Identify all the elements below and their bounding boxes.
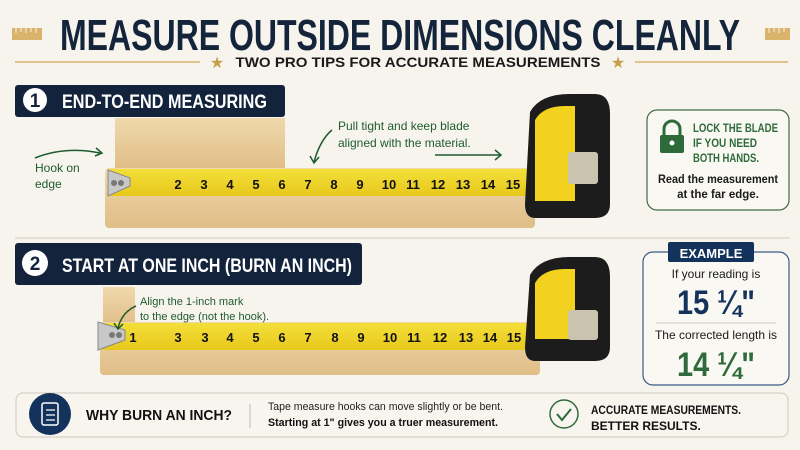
illustration 1: wood and tape: 5 (252, 177, 260, 192)
callout: align 1-inch mark: to the edge (not the hook). (140, 311, 269, 323)
panel: lock the blade: BOTH HANDS. (693, 151, 759, 165)
banner 2: 2 (30, 254, 40, 275)
illustration 2: wood and tape: 5 (252, 330, 260, 345)
illustration 2: wood and tape: 6 (278, 330, 286, 345)
bottom bar: Starting at 1" gives you a truer measurement. (268, 417, 498, 429)
banner 1: END-TO-END MEASURING (62, 92, 267, 113)
panel: lock the blade: LOCK THE BLADE (693, 121, 778, 135)
tape case 1 (525, 94, 610, 218)
illustration 1: wood and tape: 14 (481, 177, 496, 192)
illustration 1: wood and tape: 15 (506, 177, 520, 192)
illustration 1: wood and tape: 4 (226, 177, 234, 192)
illustration 1: wood and tape: 3 (200, 177, 208, 192)
illustration 1: wood and tape: 2 (174, 177, 182, 192)
illustration 1: wood and tape: 11 (406, 177, 420, 192)
callout: align 1-inch mark: Align the 1-inch mark (140, 296, 244, 308)
bottom bar: BETTER RESULTS. (591, 419, 701, 433)
icon: lock (660, 121, 684, 153)
bottom bar: WHY BURN AN INCH? (86, 407, 232, 424)
banner 1 (15, 85, 285, 117)
illustration 2: wood and tape: 1 (129, 330, 137, 345)
bottom bar: Tape measure hooks can move slightly or be bent. (268, 401, 503, 413)
illustration 1: wood and tape (105, 94, 610, 228)
callout: hook on edge: edge (35, 177, 62, 191)
icon: ruler right (765, 28, 790, 40)
illustration 2: wood and tape: 11 (407, 330, 421, 345)
illustration 2: wood and tape: 14 (483, 330, 498, 345)
panel: example (643, 242, 789, 385)
illustration 2: wood and tape: 15 (507, 330, 521, 345)
tape case 2 (525, 257, 610, 361)
illustration 1: wood and tape: 6 (278, 177, 286, 192)
subtitle (15, 54, 788, 72)
panel: lock the blade: IF YOU NEED (693, 136, 757, 150)
illustration 2: wood and tape: 7 (304, 330, 312, 345)
callout: align 1-inch mark (114, 296, 269, 329)
illustration 2: wood and tape: 10 (383, 330, 397, 345)
illustration 1: wood and tape: 8 (330, 177, 338, 192)
panel: example: If your reading is (672, 267, 760, 281)
panel: lock the blade (647, 110, 789, 210)
callout: hook on edge: Hook on (35, 161, 80, 175)
illustration 2: wood and tape: 12 (433, 330, 447, 345)
panel: example: 14 ¼" (677, 346, 755, 384)
illustration 2: wood and tape: 3 (174, 330, 182, 345)
banner 1: 1 (30, 91, 41, 112)
subtitle: ★ (210, 55, 224, 72)
bottom bar: ACCURATE MEASUREMENTS. (591, 403, 741, 417)
icon: ruler left (12, 28, 42, 40)
banner 2: START AT ONE INCH (BURN AN INCH) (62, 256, 352, 277)
illustration 1: wood and tape: 7 (304, 177, 312, 192)
panel: example: 15 ¼" (677, 284, 755, 322)
callout: pull tight (310, 119, 501, 163)
callout: hook on edge (35, 148, 102, 191)
icon: clipboard (29, 393, 71, 435)
bottom bar (16, 393, 788, 437)
illustration 2: wood and tape: 3 (201, 330, 209, 345)
subtitle: ★ (611, 55, 625, 72)
illustration 2: wood and tape: 8 (331, 330, 339, 345)
panel: lock the blade: Read the measurement (658, 174, 778, 186)
illustration 2: wood and tape: 9 (357, 330, 365, 345)
callout: pull tight: aligned with the material. (338, 136, 471, 150)
illustration 1: wood and tape: 9 (356, 177, 364, 192)
illustration 2: wood and tape: 13 (459, 330, 473, 345)
panel: example: The corrected length is (655, 328, 777, 342)
illustration 2: wood and tape: 4 (226, 330, 234, 345)
banner 2 (15, 243, 362, 285)
illustration 1: wood and tape: 13 (456, 177, 470, 192)
illustration 1: wood and tape: 10 (382, 177, 396, 192)
subtitle: TWO PRO TIPS FOR ACCURATE MEASUREMENTS (236, 54, 600, 70)
illustration 1: wood and tape: 12 (431, 177, 445, 192)
callout: pull tight: Pull tight and keep blade (338, 119, 470, 133)
panel: lock the blade: at the far edge. (677, 189, 759, 201)
icon: check (550, 400, 578, 428)
illustration 2: wood and tape (98, 257, 610, 375)
panel: example: EXAMPLE (680, 246, 743, 261)
